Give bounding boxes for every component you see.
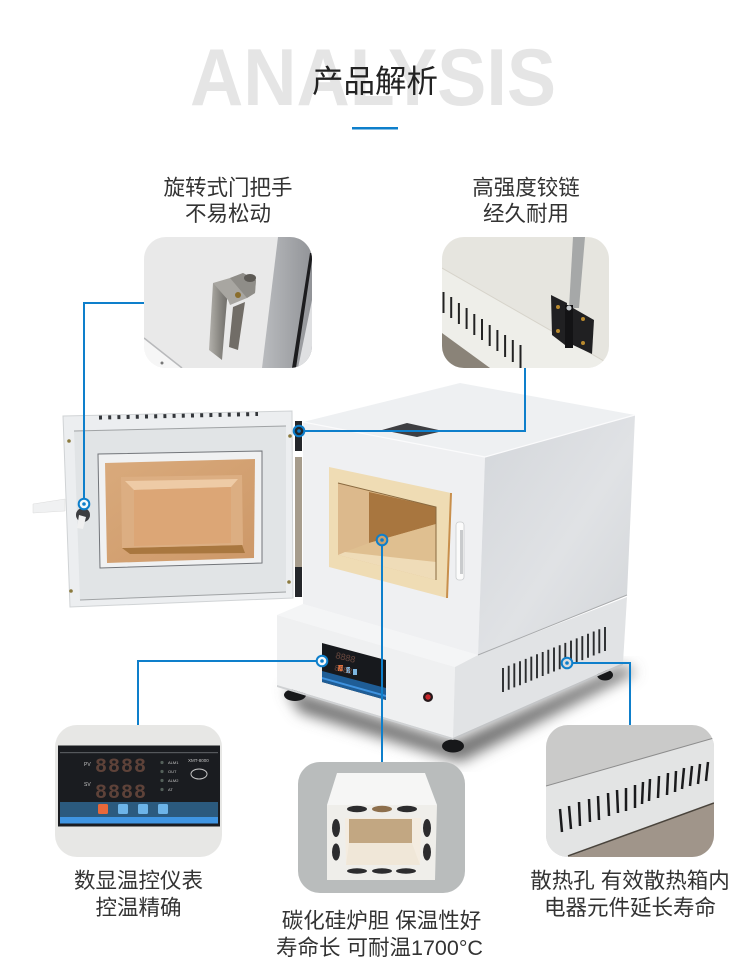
furnace vent slots xyxy=(503,627,605,692)
open furnace door xyxy=(33,411,302,607)
photo: temperature controller: ALM1 xyxy=(168,760,179,765)
label: controller: 控温精确 xyxy=(95,896,182,920)
furnace body xyxy=(277,383,635,752)
hinge hardware xyxy=(551,295,594,354)
top exhaust plate xyxy=(382,423,443,437)
label: vents: 电器元件延长寿命 xyxy=(544,896,716,920)
photo: temperature controller xyxy=(55,725,222,857)
photo: temperature controller: XMT-8000 xyxy=(188,758,209,763)
feet xyxy=(284,670,613,752)
door latch xyxy=(76,508,90,529)
upper front face xyxy=(303,422,485,655)
upper top face xyxy=(303,383,635,457)
hinge vent slots xyxy=(444,292,520,368)
callout line: door handle xyxy=(79,303,144,509)
power button xyxy=(423,692,433,702)
label: hinge: 高强度铰链 xyxy=(472,176,580,200)
photo: temperature controller: PV xyxy=(84,762,91,768)
door latch arm xyxy=(33,499,65,513)
photo: temperature controller: SV xyxy=(84,782,91,788)
label: hinge: 经久耐用 xyxy=(483,202,569,226)
background title word: ANALYSIS xyxy=(190,33,556,123)
photo: temperature controller: 8888 xyxy=(95,756,146,779)
furnace control panel: 8888 xyxy=(335,650,356,665)
callout line: controller xyxy=(138,656,327,725)
label: chamber: 碳化硅炉胆 保温性好 xyxy=(282,909,481,933)
title underline xyxy=(352,127,398,130)
base front xyxy=(277,615,455,738)
furnace ground shadow xyxy=(285,666,636,762)
door vent slots xyxy=(99,414,258,418)
furnace control panel xyxy=(322,643,386,700)
furnace chamber xyxy=(329,467,451,598)
label: vents: 散热孔 有效散热箱内 xyxy=(530,869,730,893)
label: door handle: 不易松动 xyxy=(185,202,271,226)
base side xyxy=(453,597,627,738)
label: controller: 数显温控仪表 xyxy=(74,869,203,893)
callout line: vents xyxy=(562,658,630,725)
upper side face xyxy=(478,415,635,655)
photo: door handle xyxy=(144,237,313,368)
label: chamber: 寿命长 可耐温1700°C xyxy=(276,936,483,960)
handle lever xyxy=(209,273,256,360)
door window frame xyxy=(98,451,262,568)
callout line: chamber xyxy=(377,535,387,762)
photo: temperature controller: 8888 xyxy=(95,782,146,805)
base top xyxy=(277,604,478,667)
door fire brick xyxy=(105,459,255,563)
photo: silicon carbide chamber xyxy=(298,762,465,893)
photo: temperature controller: AT xyxy=(168,787,173,792)
photo: hinge xyxy=(442,237,609,368)
callout line: hinge xyxy=(294,368,525,436)
furnace door-side catch xyxy=(456,522,464,580)
furnace control panel: 8888 xyxy=(334,663,353,676)
photo: vent slots xyxy=(546,725,714,857)
hinge strip xyxy=(295,421,302,597)
heating element holes xyxy=(332,806,431,874)
photo: temperature controller: OUT xyxy=(168,769,177,774)
photo: temperature controller: ALM2 xyxy=(168,778,179,783)
title: 产品解析 xyxy=(312,63,438,99)
label: door handle: 旋转式门把手 xyxy=(163,176,293,200)
